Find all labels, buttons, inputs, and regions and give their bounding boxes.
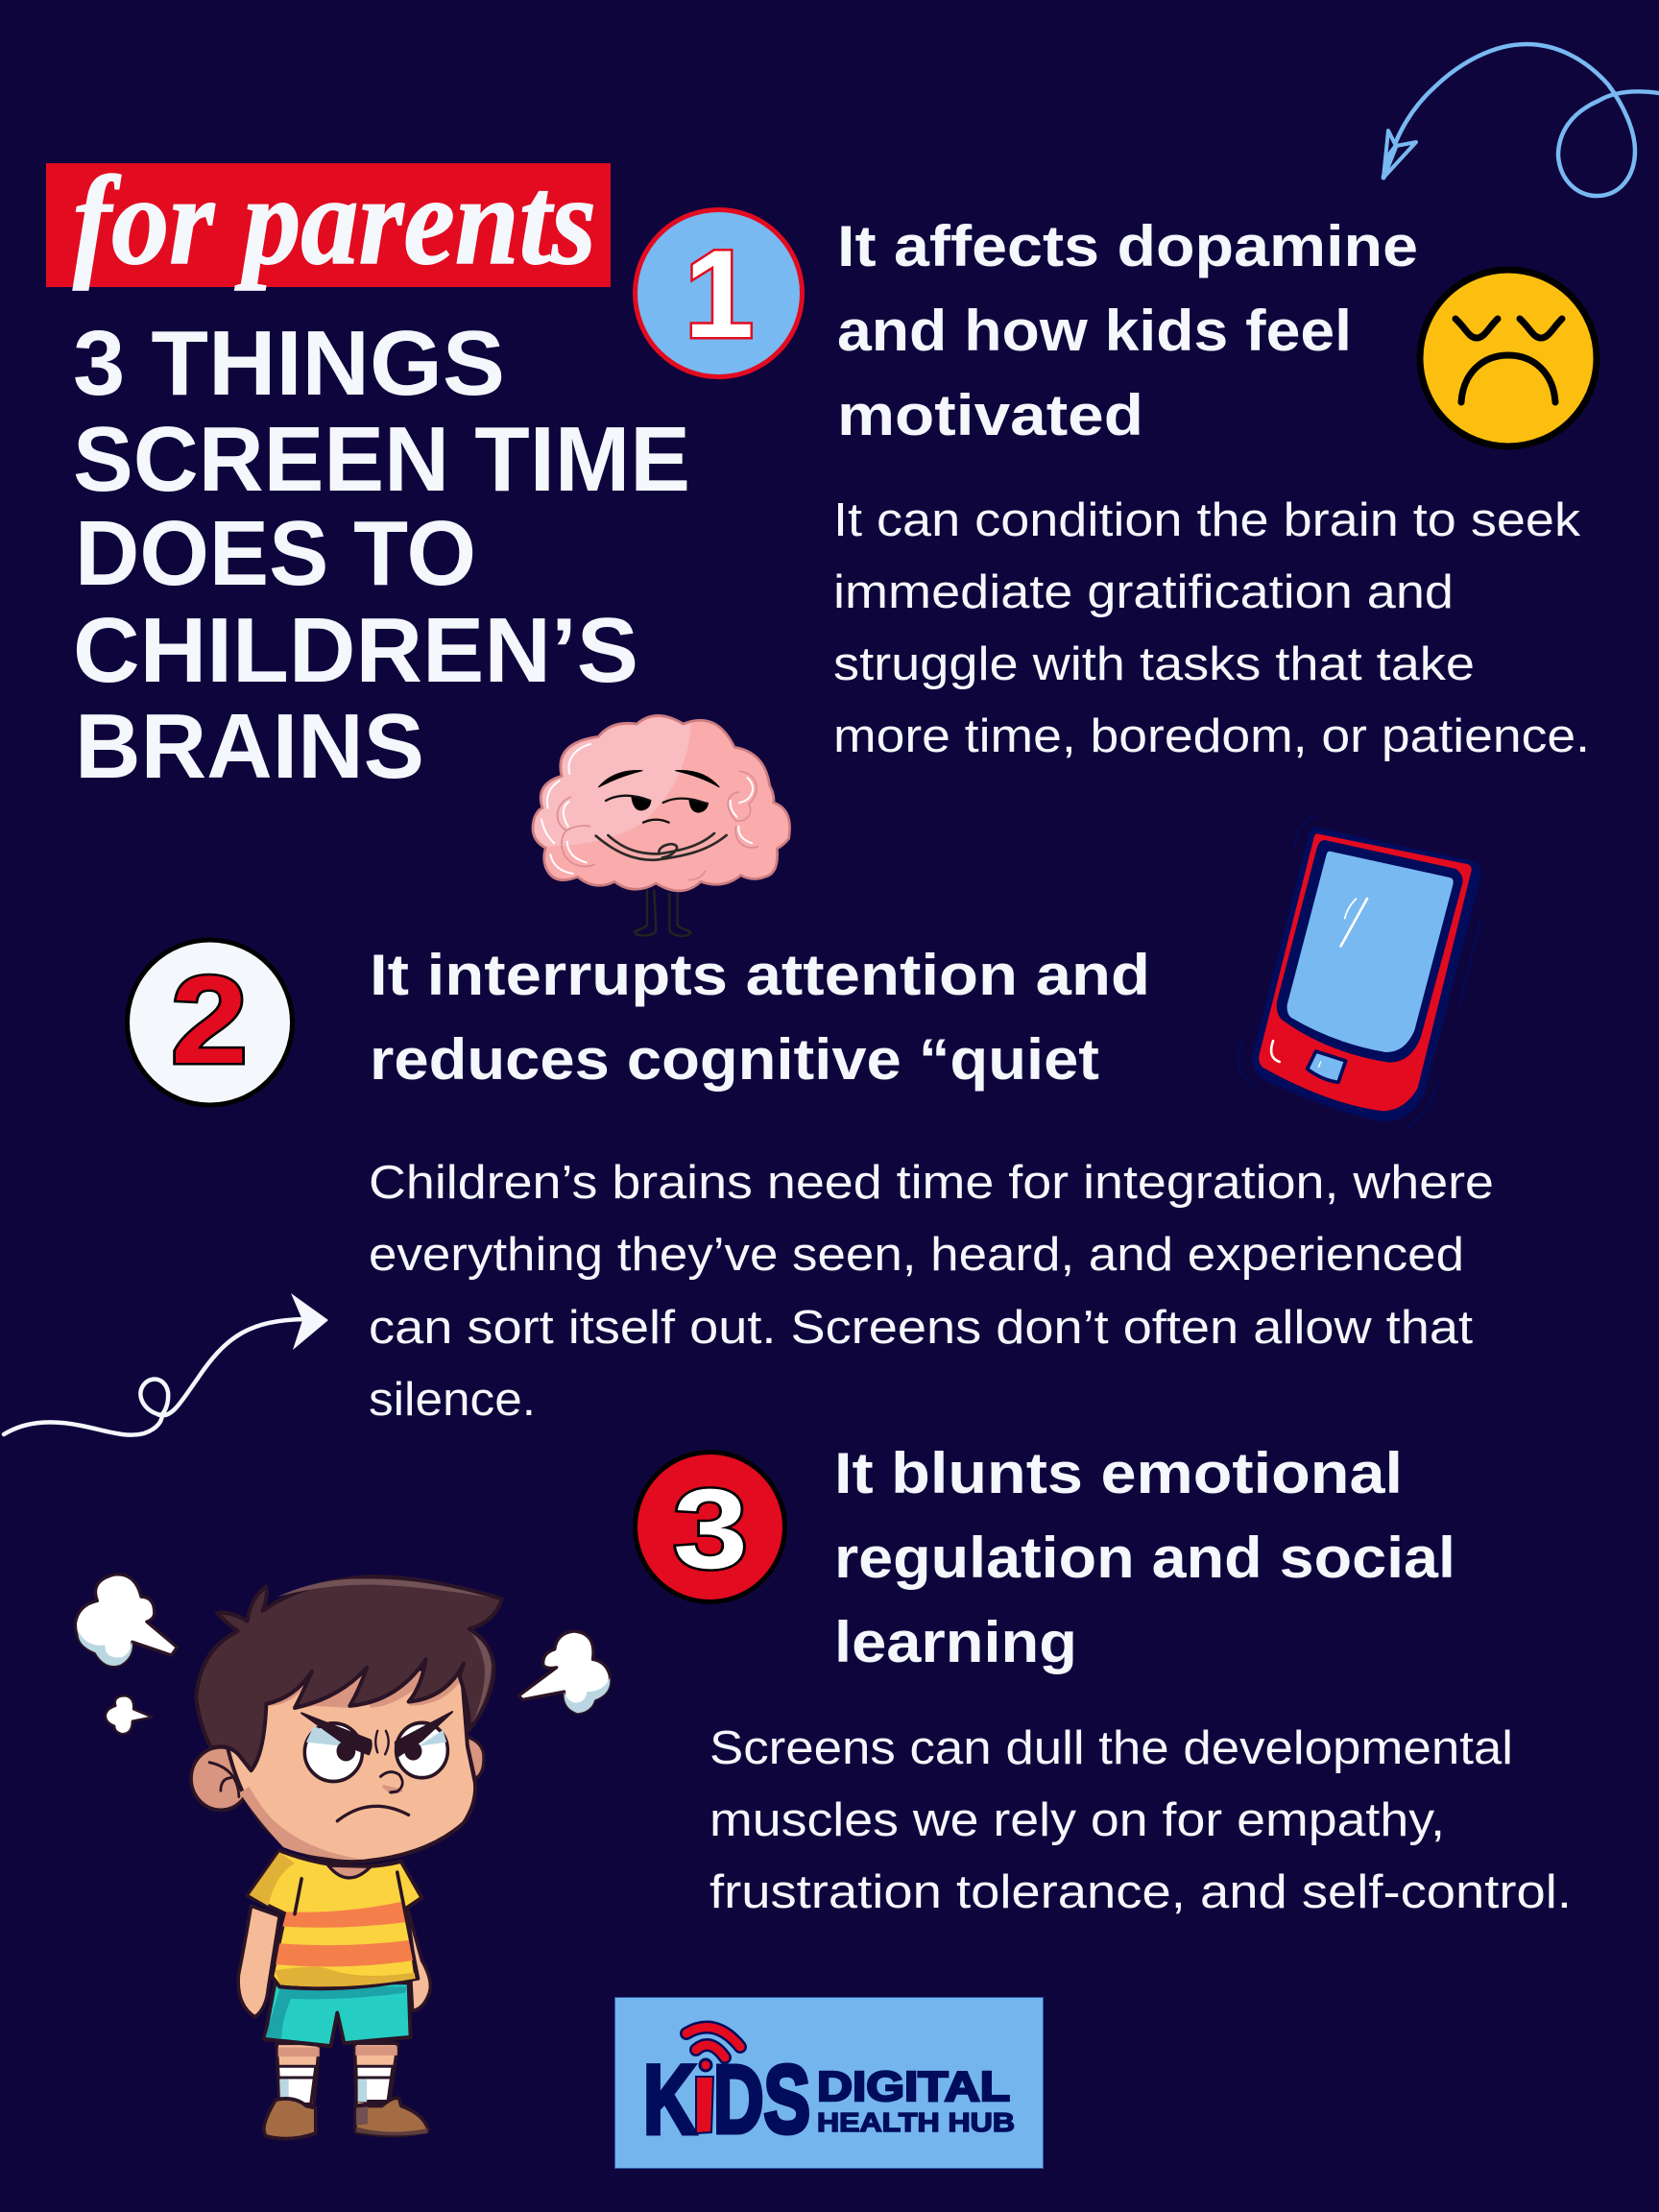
heading 1: and how kids feel	[837, 299, 1352, 363]
icon: curly blue arrow	[1383, 44, 1659, 196]
heading 3: regulation and social	[834, 1526, 1455, 1590]
heading 2: It interrupts attention and	[370, 943, 1150, 1007]
boy hair	[196, 1576, 502, 1770]
boy ears	[191, 1736, 484, 1810]
body text 2: can sort itself out. Screens don’t often allow that	[369, 1302, 1473, 1354]
logo digital health hub text	[817, 2063, 1015, 2137]
number badge 3: 3	[673, 1466, 748, 1593]
body text 2: Children’s brains need time for integration, where	[369, 1157, 1494, 1209]
icon: steam puff left	[75, 1575, 177, 1666]
logo KIDS wordmark: DS	[713, 2046, 810, 2153]
number badge 1	[636, 209, 803, 376]
boy face	[227, 1670, 475, 1862]
illustration: angry boy with steam	[75, 1575, 610, 2139]
logo KIDS wordmark	[643, 2045, 810, 2154]
body text 2	[369, 1157, 1494, 1426]
body text 1: struggle with tasks that take	[833, 638, 1475, 690]
icon: steam puff right	[518, 1631, 610, 1713]
icon: white squiggle arrow	[4, 1293, 328, 1435]
heading 2: reduces cognitive “quiet	[370, 1027, 1099, 1092]
logo digital health hub text: DIGITAL	[817, 2063, 1010, 2110]
title	[73, 312, 690, 798]
title: DOES TO	[75, 502, 476, 605]
icon: steam puff small	[106, 1695, 153, 1734]
boy legs and socks	[276, 2043, 398, 2105]
number badge 1: 1	[685, 224, 754, 364]
body text 1	[833, 494, 1590, 762]
body text 2: everything they’ve seen, heard, and experienced	[369, 1229, 1464, 1281]
icon: brain character	[533, 715, 790, 936]
boy shorts	[264, 1983, 411, 2046]
boy shoes	[264, 2098, 428, 2139]
body text 3: Screens can dull the developmental	[709, 1722, 1513, 1774]
heading 3	[834, 1441, 1455, 1674]
boy shirt	[248, 1850, 421, 1988]
body text 1: It can condition the brain to seek	[833, 494, 1581, 546]
logo: Kids Digital Health Hub	[614, 1997, 1043, 2168]
badge: for parents: for parents	[73, 150, 596, 291]
icon: sad face emoji	[1420, 270, 1597, 446]
body text 1: immediate gratification and	[833, 566, 1454, 618]
body text 3	[709, 1722, 1572, 1918]
eyes	[304, 1723, 362, 1781]
boy arms	[238, 1906, 430, 2017]
logo digital health hub text: HEALTH HUB	[817, 2107, 1015, 2137]
icon: phone	[1238, 816, 1480, 1127]
body text 3: muscles we rely on for empathy,	[709, 1794, 1445, 1846]
heading 2	[370, 943, 1150, 1092]
heading 3: learning	[834, 1610, 1077, 1674]
title: BRAINS	[75, 695, 424, 798]
logo KIDS wordmark: K	[643, 2045, 696, 2154]
number badge 2	[127, 940, 292, 1105]
heading 1: motivated	[837, 383, 1143, 447]
heading 3: It blunts emotional	[834, 1441, 1403, 1505]
body text 1: more time, boredom, or patience.	[833, 710, 1590, 762]
body text 2: silence.	[369, 1374, 536, 1426]
heading 1	[837, 214, 1418, 447]
heading 1: It affects dopamine	[837, 214, 1418, 278]
title: CHILDREN’S	[73, 599, 638, 702]
title: 3 THINGS	[73, 312, 505, 415]
title: SCREEN TIME	[73, 408, 690, 511]
number badge 2: 2	[171, 950, 248, 1090]
body text 3: frustration tolerance, and self-control.	[709, 1866, 1572, 1918]
logo wifi signal	[686, 2028, 740, 2071]
number badge 3	[636, 1452, 785, 1601]
